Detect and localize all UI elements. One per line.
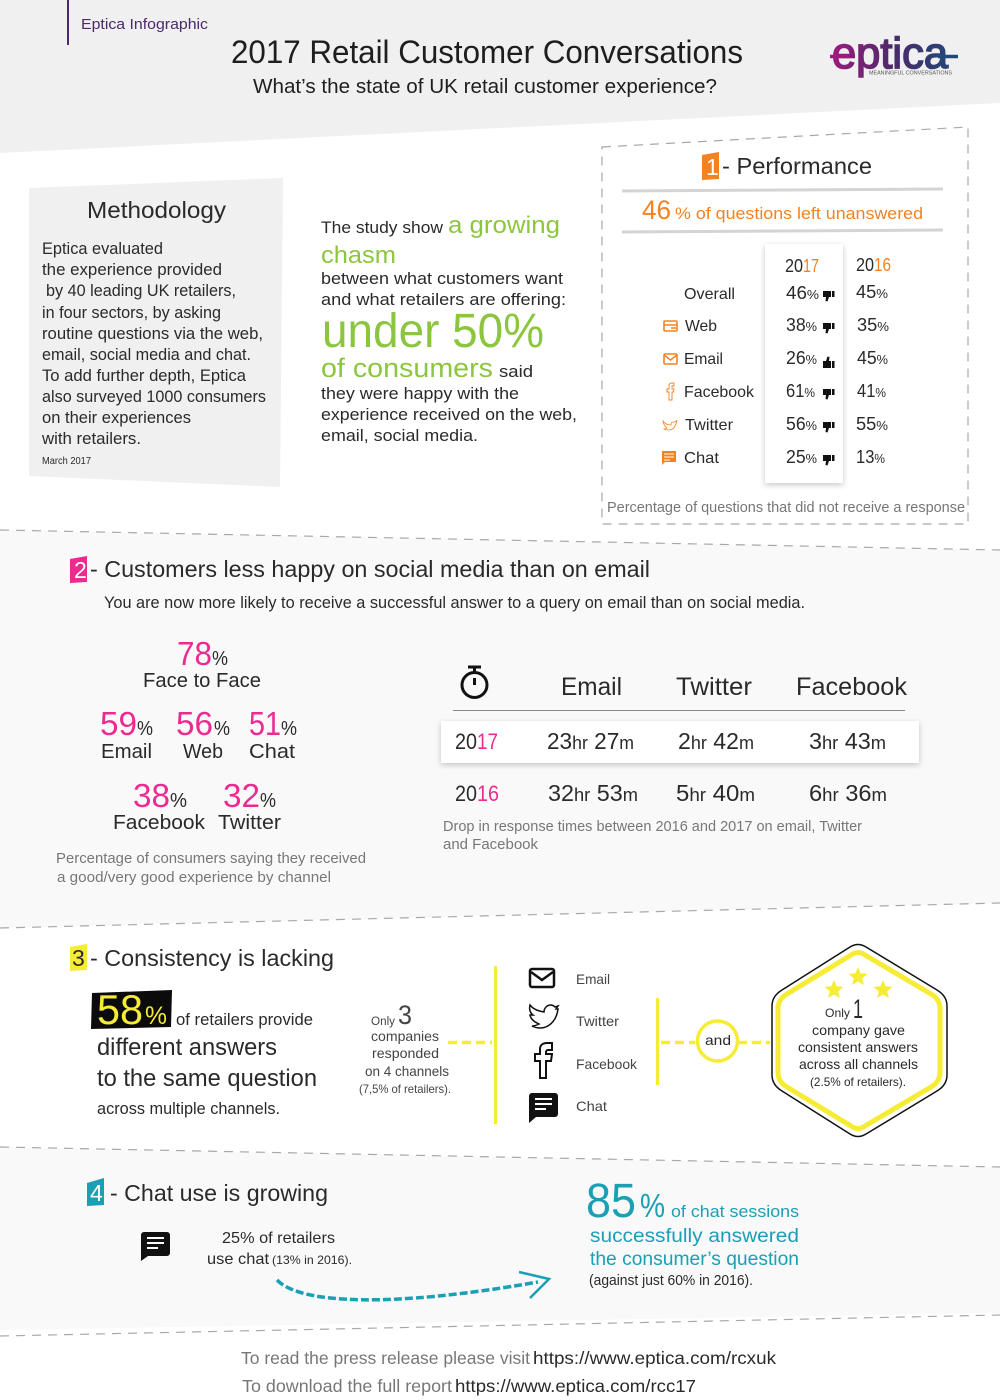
stat: 85% of chat sessions: the consumer’s question bbox=[590, 1249, 799, 1270]
values: 2016: 45% bbox=[857, 348, 888, 368]
row labels: Twitter bbox=[685, 417, 734, 434]
text block: growing chasm: The study show bbox=[321, 218, 444, 237]
chart: experience by channel: % bbox=[170, 790, 187, 812]
icon: facebook bbox=[667, 383, 674, 400]
methodology text: email, social media and chat. bbox=[42, 345, 251, 364]
column headers bbox=[785, 255, 891, 276]
text: only 3 companies: (7,5% of retailers). bbox=[359, 1082, 451, 1096]
panel: section 2 heading bbox=[70, 556, 805, 612]
connector: and bbox=[698, 1021, 738, 1061]
table caption: Drop in response times between 2016 and 2017 on email, Twitter bbox=[443, 818, 862, 835]
text: only 3 companies bbox=[359, 1000, 451, 1096]
stat: 58% of retailers: % bbox=[145, 1002, 167, 1030]
table headers: Facebook bbox=[796, 673, 907, 701]
chart: experience by channel: a good/very good experience by channel bbox=[57, 869, 331, 886]
stat: 85% of chat sessions: of chat sessions bbox=[671, 1202, 799, 1221]
values: 2016: 13% bbox=[856, 447, 885, 467]
panel: section 2 heading: - Customers less happy on social media than on email bbox=[90, 556, 650, 582]
values: 2017: 46% bbox=[786, 283, 819, 303]
table row: 2016: 32hr 53m bbox=[548, 780, 638, 806]
channel labels bbox=[576, 971, 638, 1114]
row labels: Chat bbox=[684, 450, 720, 467]
chart: experience by channel: 32 bbox=[223, 777, 260, 814]
values: 2017: 38% bbox=[786, 315, 817, 335]
table row: 2017: 23hr 27m bbox=[547, 728, 634, 754]
chart: experience by channel: 59 bbox=[100, 705, 137, 742]
text: 25% of retailers: (13% in 2016). bbox=[272, 1253, 352, 1267]
icon: email bbox=[664, 354, 677, 364]
badge: 1 bbox=[702, 152, 719, 180]
stat: 58% of retailers: to the same question bbox=[97, 1065, 317, 1092]
text block: growing chasm: of consumers bbox=[321, 353, 493, 383]
column headers: 17 bbox=[803, 256, 819, 276]
stars bbox=[824, 967, 892, 998]
chart: experience by channel: Facebook bbox=[113, 812, 206, 834]
icon: chat bbox=[662, 451, 676, 465]
chart: experience by channel: Chat bbox=[249, 741, 295, 763]
stat: 85% of chat sessions: successfully answered bbox=[590, 1226, 799, 1247]
values: 2017: 26% bbox=[786, 348, 817, 368]
channel labels: Facebook bbox=[576, 1056, 638, 1072]
icon: facebook bbox=[535, 1043, 552, 1078]
methodology text: with retailers. bbox=[41, 429, 141, 448]
chart: experience by channel: % bbox=[281, 718, 297, 740]
row labels bbox=[684, 286, 755, 467]
chart: experience by channel: % bbox=[214, 718, 230, 740]
table: response times bbox=[441, 667, 919, 853]
text block: growing chasm: experience received on the web, bbox=[321, 405, 577, 424]
text block: growing chasm bbox=[321, 212, 577, 445]
text: only 3 companies: responded bbox=[372, 1045, 439, 1061]
panel: section 3 heading: 3 bbox=[72, 945, 85, 971]
text: only 3 companies: 3 bbox=[398, 1000, 412, 1030]
values: 2016: 45% bbox=[856, 282, 888, 302]
table row: 2016 bbox=[455, 780, 887, 806]
stat: 58% of retailers: 58 bbox=[97, 986, 143, 1033]
panel: section 2 heading: 2 bbox=[74, 557, 87, 583]
stat: 85% of chat sessions: 85 bbox=[586, 1175, 636, 1228]
chart: experience by channel: Percentage of consumers saying they received bbox=[56, 850, 366, 867]
values: 2016: 41% bbox=[857, 381, 886, 401]
channel labels: Chat bbox=[576, 1098, 607, 1114]
row labels: Web bbox=[685, 318, 717, 335]
row labels: Facebook bbox=[684, 384, 755, 401]
chart: experience by channel: % bbox=[137, 718, 153, 740]
values: 2017 bbox=[786, 283, 819, 467]
table caption bbox=[443, 818, 862, 853]
text block: growing chasm: under 50% bbox=[322, 305, 544, 358]
text: only 3 companies: companies bbox=[371, 1028, 439, 1044]
footer links: https://www.eptica.com/rcxuk bbox=[533, 1348, 776, 1368]
stat: 46% unanswered bbox=[642, 195, 923, 225]
column headers: 20 bbox=[856, 255, 874, 275]
methodology text: Eptica evaluated bbox=[42, 239, 163, 258]
panel: section 2 heading: You are now more likely to receive a successful answer to a query on email than on social media. bbox=[104, 594, 805, 612]
methodology text: routine questions via the web, bbox=[42, 324, 263, 343]
chart: experience by channel: % bbox=[260, 790, 276, 812]
text: only 3 companies: Only bbox=[371, 1016, 395, 1028]
chart: experience by channel: Twitter bbox=[218, 812, 281, 834]
values: 2017: 61% bbox=[786, 381, 815, 401]
text: 25% of retailers: use chat bbox=[207, 1251, 270, 1268]
icon: chat bbox=[529, 1093, 558, 1123]
header tag: Eptica Infographic bbox=[81, 16, 209, 33]
highlight card: 2017 bbox=[765, 244, 843, 483]
text: 25% of retailers bbox=[207, 1230, 352, 1268]
values: 2016 bbox=[856, 282, 889, 467]
table row: 2016: 6hr 36m bbox=[809, 780, 887, 806]
hexagon callout: consistent answers bbox=[798, 1039, 918, 1055]
stat: 46% unanswered: 46 bbox=[642, 195, 671, 225]
table row: 2017: 17 bbox=[477, 729, 498, 754]
arrow bbox=[277, 1272, 549, 1300]
panel: section 4 heading: 4 bbox=[90, 1180, 103, 1206]
methodology heading: Methodology bbox=[87, 197, 227, 223]
table caption: and Facebook bbox=[443, 836, 538, 853]
icon: stopwatch bbox=[462, 667, 487, 698]
methodology text: To add further depth, Eptica bbox=[42, 366, 247, 385]
values: 2017: 25% bbox=[786, 447, 817, 467]
icons: thumbs bbox=[823, 291, 834, 466]
icon: email bbox=[530, 969, 554, 987]
stat: 58% of retailers: across multiple channels. bbox=[97, 1099, 280, 1118]
channel labels: Email bbox=[576, 971, 610, 987]
table headers: Email bbox=[561, 673, 622, 701]
icon: web bbox=[664, 321, 677, 331]
panel: header background bbox=[0, 0, 1000, 153]
text block: growing chasm: they were happy with the bbox=[321, 384, 519, 403]
footer links bbox=[241, 1348, 776, 1396]
text block: growing chasm: said bbox=[499, 362, 533, 381]
text block: growing chasm: a growing bbox=[448, 212, 560, 239]
icon: twitter bbox=[530, 1005, 558, 1028]
text: only 3 companies: on 4 channels bbox=[365, 1063, 449, 1079]
footer links: To download the full report bbox=[242, 1376, 452, 1396]
methodology text: also surveyed 1000 consumers bbox=[42, 387, 266, 406]
table row: 2017: 2hr 42m bbox=[678, 728, 754, 754]
panel: methodology bbox=[29, 178, 283, 487]
methodology text: March 2017 bbox=[42, 456, 91, 467]
stat: 58% of retailers: of retailers provide bbox=[176, 1010, 313, 1029]
methodology text: in four sectors, by asking bbox=[42, 303, 221, 322]
hexagon callout: across all channels bbox=[799, 1056, 918, 1072]
panel: section 3 heading: - Consistency is lacking bbox=[90, 945, 334, 971]
text block: growing chasm: email, social media. bbox=[321, 426, 478, 445]
column headers: 16 bbox=[874, 255, 891, 275]
text: 25% of retailers: 25% of retailers bbox=[222, 1230, 335, 1247]
logo: eptica bbox=[832, 29, 949, 78]
table row: 2016: 5hr 40m bbox=[676, 780, 755, 806]
stat: 58% of retailers: different answers bbox=[97, 1034, 277, 1061]
methodology text: by 40 leading UK retailers, bbox=[46, 281, 236, 300]
table row: 2017: 3hr 43m bbox=[809, 728, 886, 754]
chart: experience by channel bbox=[56, 635, 366, 886]
column headers: 20 bbox=[785, 256, 803, 276]
stat: 46% unanswered: % of questions left unanswered bbox=[675, 204, 923, 223]
hexagon callout: (2.5% of retailers). bbox=[810, 1075, 906, 1089]
values: 2017: 56% bbox=[786, 414, 817, 434]
performance caption: Percentage of questions that did not receive a response bbox=[607, 499, 965, 516]
table row: 2016: 20 bbox=[455, 781, 477, 806]
icon: chat bbox=[141, 1232, 170, 1261]
chart: experience by channel: 51 bbox=[249, 705, 281, 742]
icon: twitter bbox=[663, 420, 677, 430]
chart: experience by channel: % bbox=[212, 648, 228, 670]
badge: 1: 1 bbox=[706, 154, 719, 180]
text block: growing chasm: chasm bbox=[321, 242, 396, 269]
stat: 85% of chat sessions bbox=[586, 1175, 799, 1289]
stat: 85% of chat sessions: % bbox=[640, 1187, 665, 1224]
title: 2017 Retail Customer Conversations bbox=[231, 34, 743, 70]
row labels: Email bbox=[684, 351, 723, 368]
hexagon callout bbox=[772, 944, 947, 1136]
methodology text: on their experiences bbox=[42, 408, 191, 427]
chart: experience by channel: Face to Face bbox=[143, 670, 261, 692]
hexagon callout: Only bbox=[825, 1006, 850, 1020]
table row: 2016: 16 bbox=[477, 781, 499, 806]
table row: 2017 bbox=[441, 721, 919, 763]
chart: experience by channel: 38 bbox=[133, 777, 170, 814]
hexagon callout: company gave bbox=[812, 1022, 905, 1038]
stat: 58% of retailers bbox=[91, 986, 317, 1118]
channel labels: Twitter bbox=[576, 1013, 619, 1029]
heading: performance: - Performance bbox=[722, 153, 872, 179]
values: 2016: 35% bbox=[857, 315, 889, 335]
row labels: Overall bbox=[684, 286, 735, 303]
stat: 85% of chat sessions: (against just 60% in 2016). bbox=[589, 1273, 753, 1289]
footer links: To read the press release please visit bbox=[241, 1348, 530, 1368]
logo: MEANINGFUL CONVERSATIONS bbox=[869, 70, 953, 76]
subtitle: What’s the state of UK retail customer experience? bbox=[253, 76, 717, 98]
chart: experience by channel: 78 bbox=[177, 635, 212, 672]
table row: 2017: 20 bbox=[455, 729, 477, 754]
table headers: Twitter bbox=[676, 673, 752, 701]
methodology text: the experience provided bbox=[42, 260, 222, 279]
chart: experience by channel: Web bbox=[183, 741, 223, 763]
panel: section 4 background bbox=[0, 1147, 1000, 1330]
hexagon callout: 1 bbox=[853, 994, 863, 1024]
table headers bbox=[561, 673, 907, 701]
connector: and: and bbox=[705, 1032, 731, 1048]
panel: section 2 background bbox=[0, 530, 1000, 928]
panel: section 4 heading: - Chat use is growing bbox=[110, 1180, 328, 1206]
footer links: https://www.eptica.com/rcc17 bbox=[455, 1376, 696, 1396]
chart: experience by channel: Email bbox=[101, 741, 152, 763]
text block: growing chasm: and what retailers are offering: bbox=[321, 290, 566, 309]
values: 2016: 55% bbox=[856, 414, 888, 434]
methodology text bbox=[41, 239, 266, 467]
panel: performance bbox=[602, 127, 968, 524]
chart: experience by channel: 56 bbox=[176, 705, 213, 742]
text block: growing chasm: between what customers want bbox=[321, 269, 563, 288]
